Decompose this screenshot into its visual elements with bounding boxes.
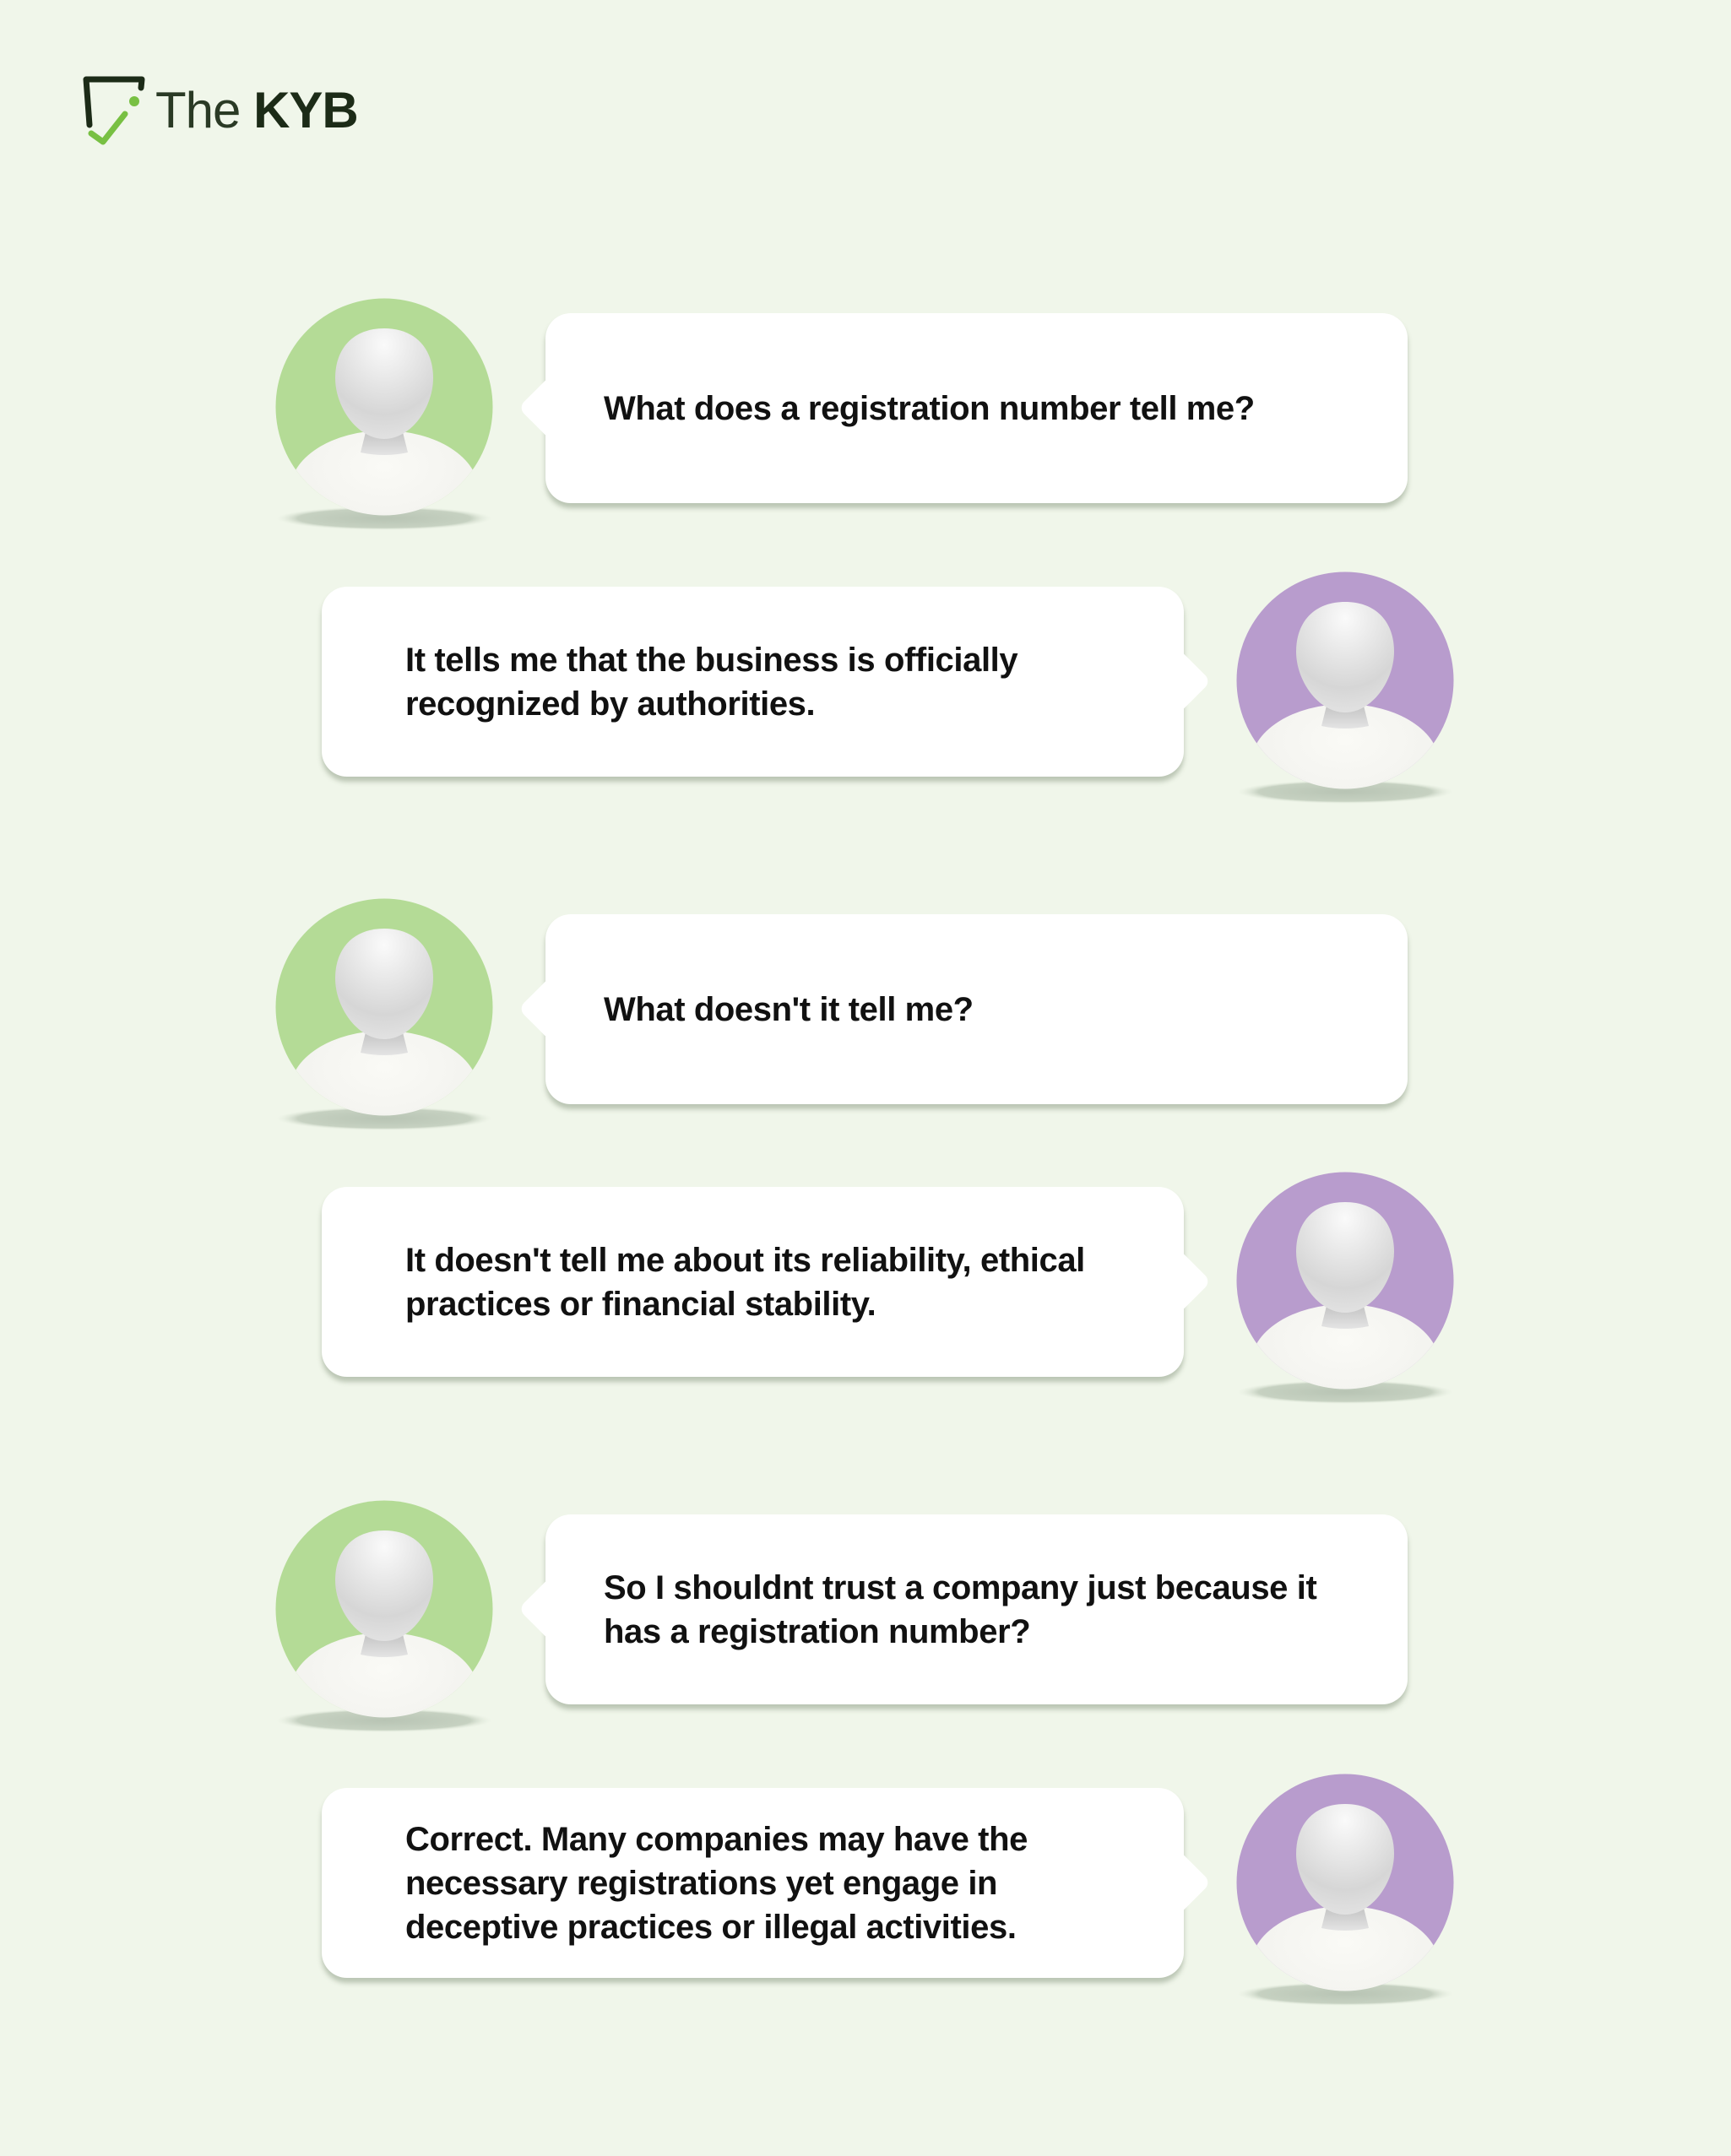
bubble: question 3: So I shouldnt trust a company just because it bbox=[604, 1568, 1316, 1606]
avatar: green 3 bbox=[275, 1501, 493, 1731]
logo bbox=[83, 76, 358, 145]
bubble: answer 2: practices or financial stability. bbox=[405, 1285, 876, 1322]
avatar: green 1 bbox=[275, 299, 493, 529]
bubble: answer 3: necessary registrations yet engage in bbox=[405, 1864, 997, 1901]
bubble: answer 2 bbox=[322, 1187, 1184, 1377]
bubble: question 1 bbox=[545, 313, 1408, 503]
bubble: question 3: has a registration number? bbox=[604, 1612, 1030, 1650]
bubble: question 2 bbox=[545, 914, 1408, 1104]
bubble: answer 1: recognized by authorities. bbox=[405, 685, 815, 723]
avatar: green 2 bbox=[275, 898, 493, 1129]
avatar: purple 3 bbox=[1236, 1774, 1454, 2005]
avatar: purple 2 bbox=[1236, 1172, 1454, 1403]
bubble: question 3 bbox=[545, 1514, 1408, 1704]
bubble: answer 1: It tells me that the business is officially bbox=[405, 642, 1017, 679]
icon: shield check bbox=[83, 76, 145, 145]
bubble: answer 1 bbox=[322, 587, 1184, 777]
bubble: question 1: What does a registration number tell me? bbox=[604, 390, 1255, 427]
avatar: purple 1 bbox=[1236, 572, 1454, 803]
brand name: The KYB bbox=[155, 82, 358, 138]
bubble: question 2: What doesn't it tell me? bbox=[604, 991, 974, 1028]
bubble: answer 3: Correct. Many companies may have the bbox=[405, 1820, 1028, 1857]
bubble: answer 3: deceptive practices or illegal activities. bbox=[405, 1908, 1017, 1945]
bubble: answer 3 bbox=[322, 1788, 1184, 1978]
bubble: answer 2: It doesn't tell me about its reliability, ethical bbox=[405, 1241, 1085, 1278]
